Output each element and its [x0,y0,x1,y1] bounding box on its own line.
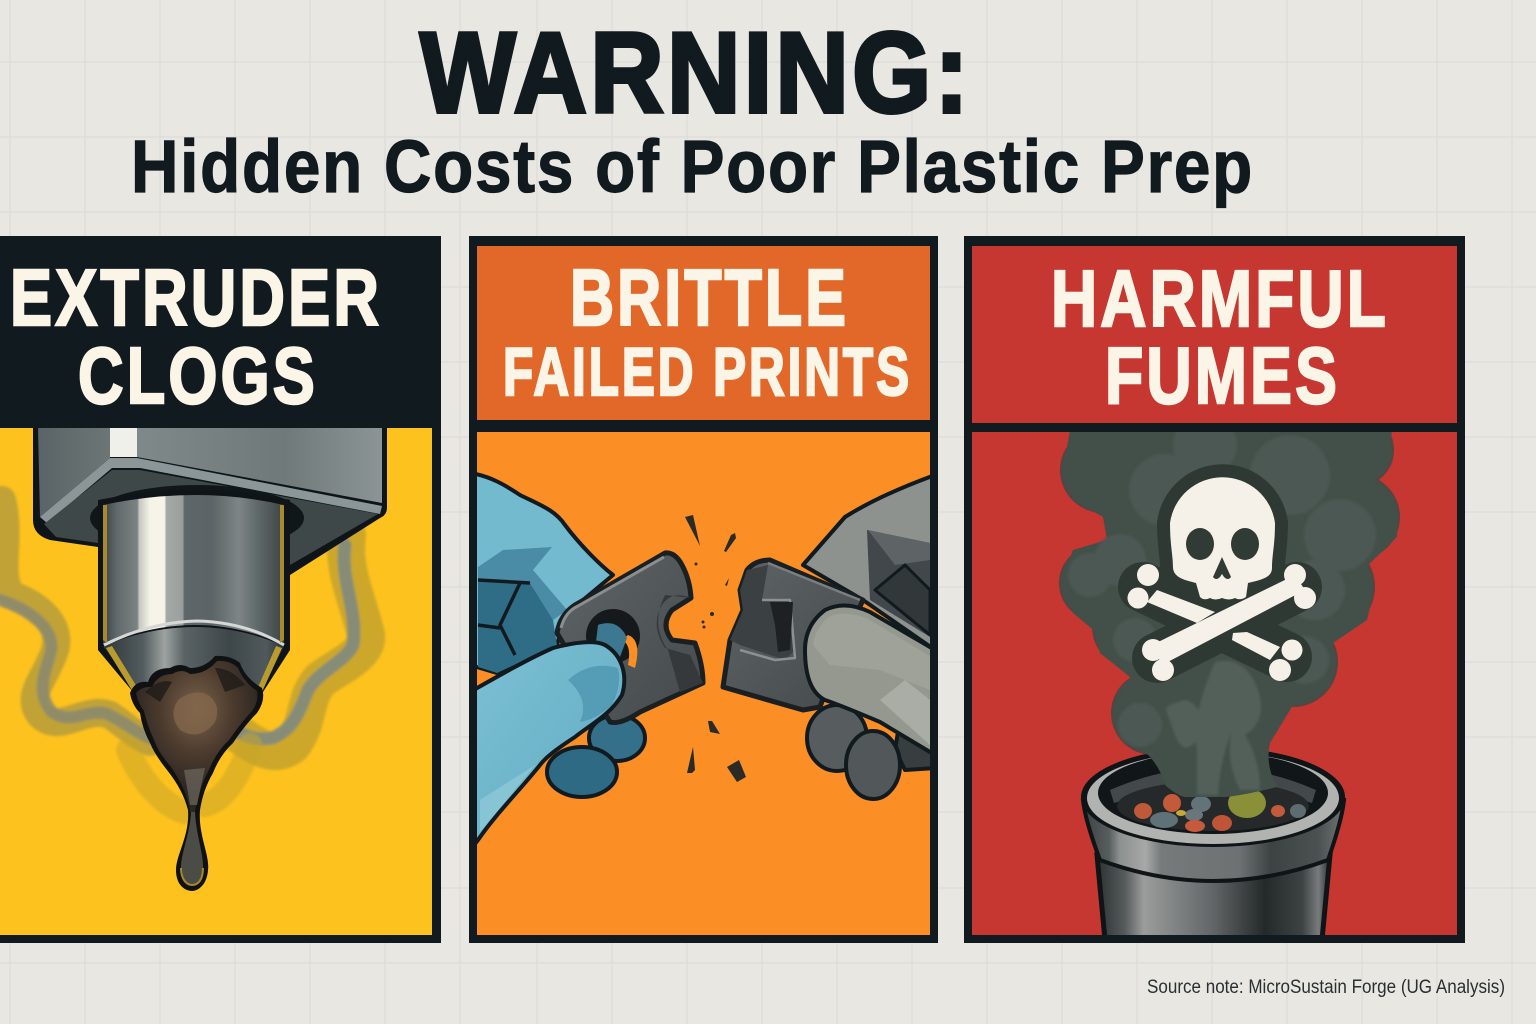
heading: extruder clogs: EXTRUDER [10,253,382,342]
subtitle: Hidden Costs of Poor Plastic Prep [131,125,1254,208]
nozzle body [98,490,290,692]
panel: brittle failed prints [469,236,938,943]
clog mass [130,656,263,891]
halo behind skull and bones [1143,477,1297,658]
skull and crossbones [1128,477,1316,681]
left thumb [470,642,624,850]
heading: extruder clogs: CLOGS [78,331,318,420]
heading: harmful fumes: FUMES [1105,331,1340,420]
smoke cloud [1060,413,1399,797]
left glove back of hand [470,473,613,673]
title: WARNING: [420,10,972,137]
heading: brittle failed prints [503,253,912,410]
panel: harmful fumes [964,236,1465,943]
extruder block [33,428,387,575]
right broken piece [723,560,863,710]
left broken piece [557,553,703,723]
mixed plastic pebbles [1134,788,1306,832]
skull [1170,477,1275,600]
lower left fingers [589,715,645,761]
heading: brittle failed prints: BRITTLE [570,253,849,342]
heading: brittle failed prints: FAILED PRINTS [503,334,912,410]
bone front [1142,564,1316,681]
hole in left piece [586,609,640,663]
panel: extruder clogs [0,236,441,943]
illustration: clogged nozzle [0,428,387,891]
bone rear [1128,564,1302,681]
illustration: snapped part held by gloved hands [470,473,935,850]
heading: extruder clogs [10,253,382,420]
right thumb [805,605,935,755]
cup body [1081,747,1345,940]
illustration: burning plastic cup with skull fumes [1060,413,1399,940]
smoke wisps [0,500,366,812]
heading: harmful fumes [1051,254,1389,420]
source note: Source note: MicroSustain Forge (UG Analysis) [1147,977,1505,998]
debris fragments [685,515,746,782]
heading: harmful fumes: HARMFUL [1051,254,1389,343]
lower right fingers [894,734,930,772]
right glove back of hand [803,475,935,650]
